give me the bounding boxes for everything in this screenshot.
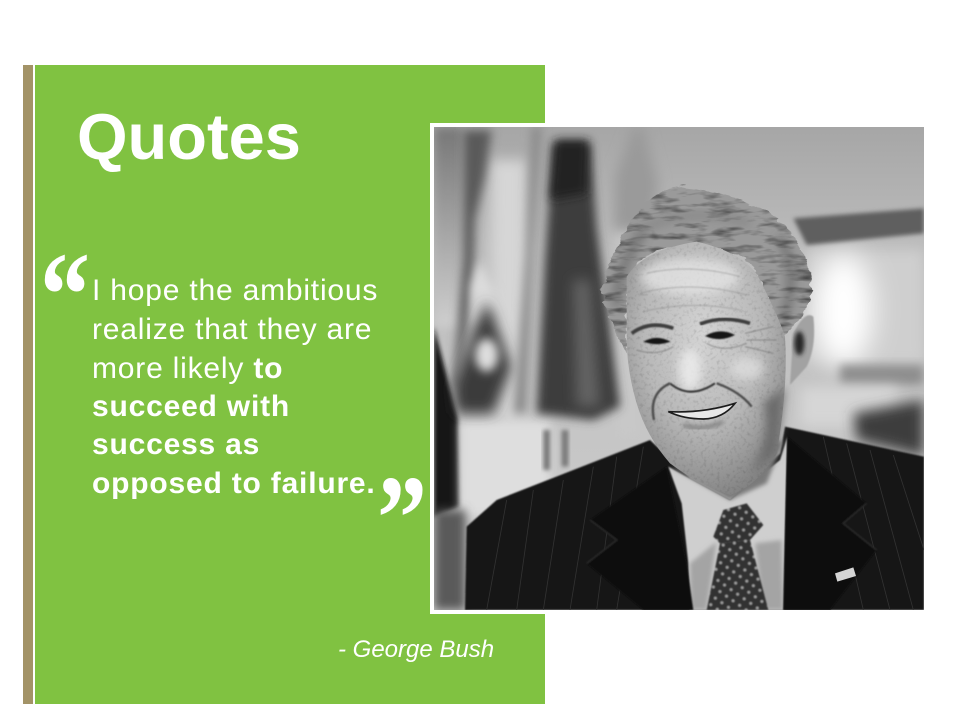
- shirt shadows: [690, 540, 783, 610]
- shirt: [668, 437, 787, 610]
- lapel pin: [835, 567, 856, 582]
- neck: [670, 440, 783, 500]
- quote text: opposed to failure.: [92, 467, 376, 500]
- opening quotation mark: “: [40, 228, 90, 363]
- photo frame: [430, 123, 545, 614]
- lapels: [587, 437, 877, 610]
- ear: [790, 315, 814, 385]
- quote text: realize that they are: [92, 313, 372, 346]
- tie: [707, 503, 768, 610]
- quote text: more likely to: [92, 352, 283, 385]
- title: Quotes: [77, 100, 301, 173]
- face: [627, 242, 786, 495]
- suit: [465, 427, 924, 610]
- quote text: succeed with: [92, 390, 290, 423]
- background wall: [434, 127, 924, 610]
- quote text: [92, 274, 378, 500]
- flags and tassels: [434, 127, 658, 610]
- quote text: success as: [92, 428, 260, 461]
- quote text: I hope the ambitious: [92, 274, 378, 307]
- closing quotation mark: ”: [377, 451, 427, 586]
- attribution: - George Bush: [338, 636, 494, 663]
- tan accent bar: [23, 65, 33, 704]
- hair: [602, 187, 811, 353]
- green panel: [35, 65, 545, 704]
- portrait photo: [434, 127, 924, 610]
